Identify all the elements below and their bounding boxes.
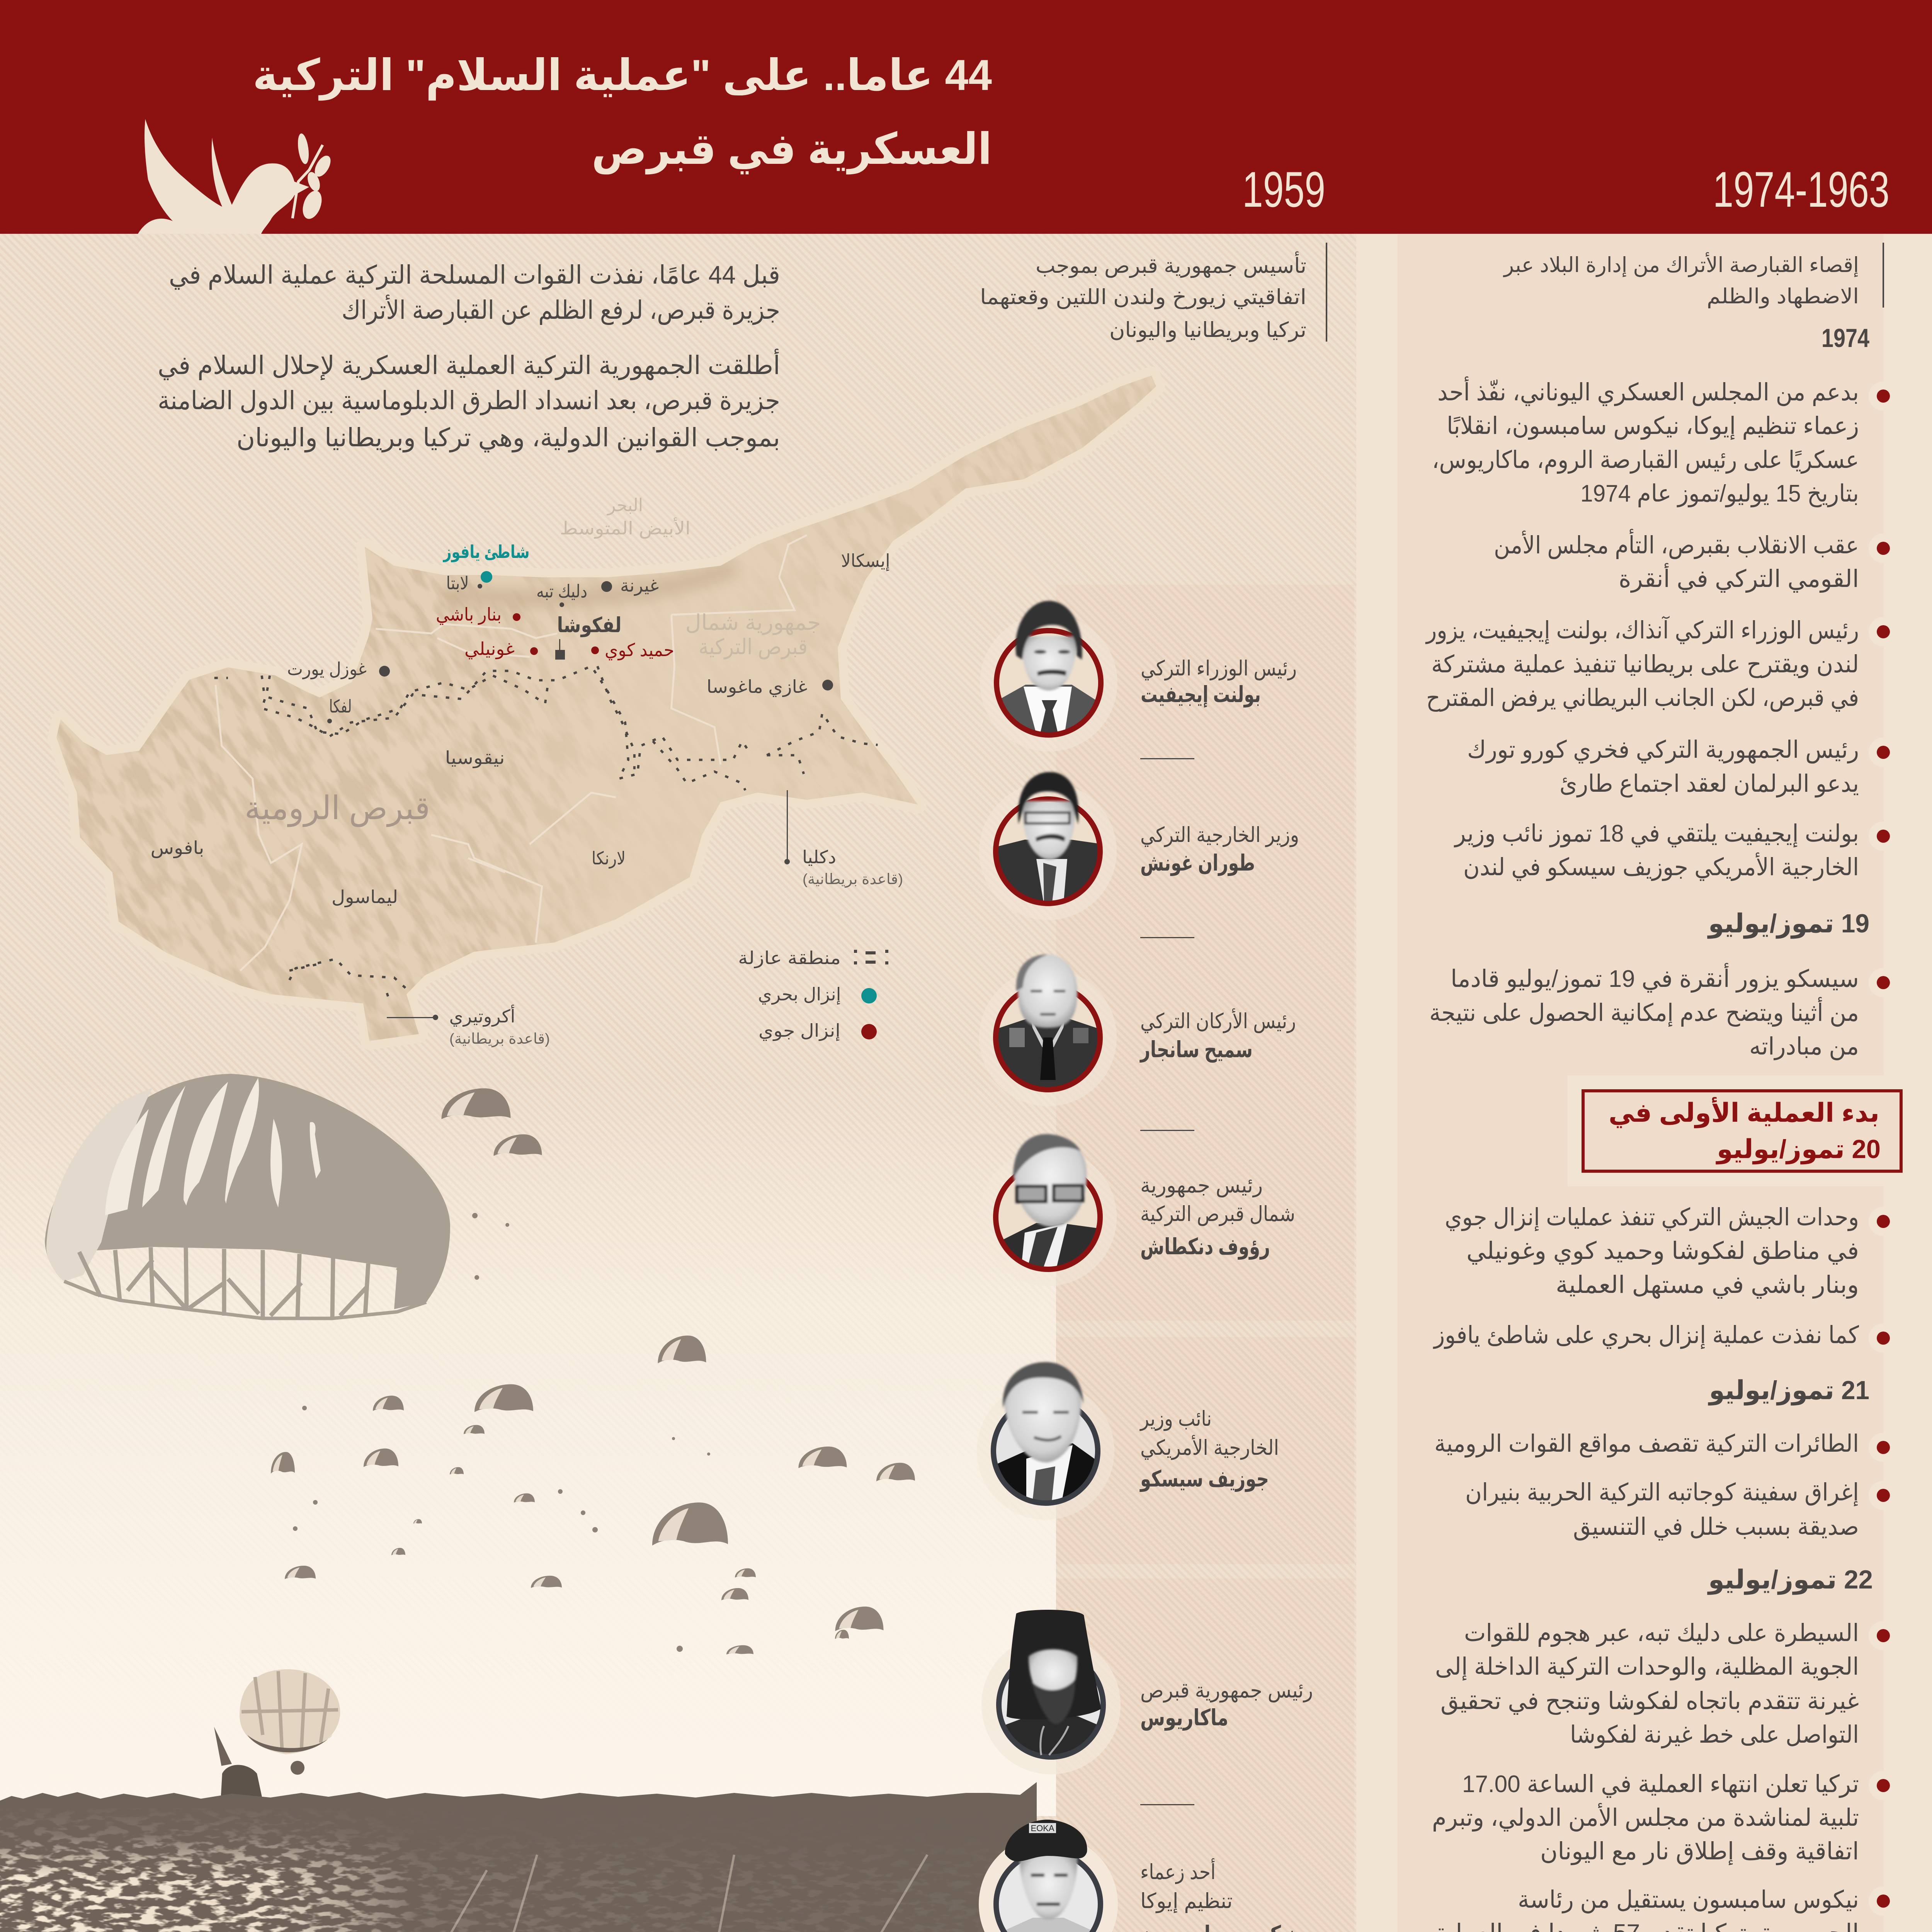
city markers: غيرنة — [620, 575, 659, 596]
1959 event text: اتفاقيتي زيورخ ولندن اللتين وقعتهما — [980, 286, 1306, 309]
caption: Ecevit: رئيس الوزراء التركي — [1141, 657, 1297, 680]
near parachute and soldier — [214, 1669, 340, 1808]
event text: Sisco in Ankara: من أثينا ويتضح عدم إمكانية الحصول على نتيجة — [1429, 997, 1859, 1027]
event text: airborne landings: في مناطق لفكوشا وحميد كوي وغونيلي — [1466, 1238, 1859, 1265]
caption: Denktas: رئيس جمهورية — [1140, 1174, 1263, 1197]
caption: Sampson — [1140, 1858, 1295, 1932]
city markers: إيسكالا — [841, 551, 890, 571]
event text: Dilekkaya: السيطرة على دليك تبه، عبر هجوم للقوات — [1464, 1620, 1859, 1647]
city markers: لارنكا — [592, 848, 626, 869]
distant parachutes — [271, 1088, 915, 1655]
city markers: لابتا — [446, 573, 469, 593]
buffer zone dotted line — [214, 666, 878, 997]
caption: Gunes: طوران غونش — [1140, 850, 1255, 876]
city markers: بافوس — [151, 838, 204, 859]
intro text: أطلقت الجمهورية التركية العملية العسكرية لإحلال السلام في — [158, 349, 780, 380]
city markers: غازي ماغوسا — [706, 677, 808, 697]
ground — [0, 1782, 1037, 1932]
event text: airborne landings: وبنار باشي في مستهل العملية — [1556, 1272, 1859, 1299]
event text: coup: زعماء تنظيم إيوكا، نيكوس سامبسون، انقلابًا — [1447, 413, 1859, 440]
intro text: جزيرة قبرص، لرفع الظلم عن القبارصة الأتراك — [342, 294, 780, 325]
caption: Denktas: شمال قبرص التركية — [1140, 1202, 1295, 1226]
event text: Sisco in Ankara — [1429, 963, 1859, 1060]
city markers — [151, 551, 890, 908]
caption: Sampson: تنظيم إيوكا — [1140, 1889, 1233, 1913]
caption: Sampson: أحد زعماء — [1140, 1858, 1216, 1884]
sea label: الأبيض المتوسط — [560, 517, 690, 539]
Yavuz beach marker: شاطئ يافوز — [443, 542, 529, 562]
1959 event text — [980, 243, 1327, 342]
event text: Dilekkaya — [1435, 1620, 1859, 1748]
caption: Sisco: الخارجية الأمريكي — [1140, 1435, 1279, 1460]
city markers: لفكا — [329, 696, 352, 716]
right column: operation events — [1432, 1204, 1873, 1932]
heading: 19 July: 19 تموز/يوليو — [1707, 909, 1869, 939]
callout: first operation: 20 تموز/يوليو — [1716, 1134, 1881, 1165]
airborne landing markers: بنار باشي — [436, 604, 502, 625]
Akrotiri base callout: (قاعدة بريطانية) — [449, 1031, 550, 1048]
heading: 21 July: 21 تموز/يوليو — [1708, 1376, 1869, 1406]
map legend: إنزال بحري — [758, 984, 841, 1005]
region labels: قبرص التركية — [699, 634, 808, 660]
heading: 1974: 1974 — [1821, 323, 1869, 353]
event text: Kocatepe: إغراق سفينة كوجاتبه التركية الحربية بنيران — [1465, 1479, 1859, 1507]
airborne landing markers: حميد كوي — [605, 640, 674, 661]
right column: timeline bullets — [1869, 381, 1898, 1932]
event text: naval landing: كما نفذت عملية إنزال بحري على شاطئ يافوز — [1433, 1322, 1859, 1349]
intro text: جزيرة قبرص، بعد انسداد الطرق الدبلوماسية بين الدول الضامنة — [158, 386, 780, 416]
event text: ceasefire — [1432, 1771, 1859, 1866]
sea label — [560, 495, 690, 539]
event text: security council — [1494, 529, 1859, 593]
event text: Dilekkaya: التواصل على خط غيرنة لفكوشا — [1570, 1721, 1859, 1748]
airborne landing markers — [436, 604, 674, 661]
caption: Gunes: وزير الخارجية التركي — [1140, 823, 1299, 847]
city markers: غوزل يورت — [287, 659, 367, 680]
event text: parliament: يدعو البرلمان لعقد اجتماع طارئ — [1560, 770, 1859, 798]
title: العسكرية في قبرص — [592, 125, 992, 175]
event text: coup: بدعم من المجلس العسكري اليوناني، نفّذ أحد — [1437, 376, 1859, 406]
city markers: دليك تبه — [536, 581, 587, 601]
event text: Sampson resigns — [1435, 1886, 1859, 1932]
event text: ceasefire: تركيا تعلن انتهاء العملية في الساعة 17.00 — [1462, 1771, 1859, 1798]
island land mass — [56, 376, 1156, 1041]
caption: Makarios: رئيس جمهورية قبرص — [1140, 1679, 1313, 1702]
event text: Ecevit in London — [1425, 616, 1859, 712]
event text: parliament: رئيس الجمهورية التركي فخري كورو تورك — [1467, 736, 1859, 764]
event text: security council: القومي التركي في أنقرة — [1619, 563, 1859, 593]
caption: Ecevit: بولنت إيجيفيت — [1141, 682, 1261, 708]
1959 event text: تركيا وبريطانيا واليونان — [1109, 318, 1306, 342]
region labels: جمهورية شمال — [685, 610, 821, 635]
event text: Sisco in Ankara: من مبادراته — [1749, 1033, 1859, 1060]
city markers: ليماسول — [332, 887, 398, 908]
event text: coup: عسكريًا على رئيس القبارصة الروم، ماكاريوس، — [1432, 447, 1859, 474]
district borders — [216, 535, 807, 971]
event text: coup: بتاريخ 15 يوليو/تموز عام 1974 — [1580, 480, 1859, 507]
map of Cyprus — [48, 367, 1165, 1049]
heading: 1959: 1959 — [1242, 161, 1325, 218]
right column: 1974 events — [1425, 323, 1869, 1060]
map legend — [738, 948, 888, 1041]
callout: first operation: بدء العملية الأولى في — [1609, 1097, 1879, 1128]
caption: Denktas: رؤوف دنكطاش — [1140, 1234, 1270, 1260]
person: Turan Gunes — [979, 772, 1117, 920]
sea label: البحر — [607, 495, 643, 516]
event text: Sisco in Ankara: سيسكو يزور أنقرة في 19 تموز/يوليو قادما — [1451, 963, 1859, 993]
event text: Sampson resigns: نيكوس سامبسون يستقيل من رئاسة — [1518, 1886, 1859, 1913]
event text: parliament — [1467, 736, 1859, 798]
region labels — [245, 610, 821, 827]
person: Bulent Ecevit — [980, 601, 1117, 752]
intro text: قبل 44 عامًا، نفذت القوات المسلحة التركية عملية السلام في — [169, 260, 780, 290]
Yavuz beach marker — [443, 542, 529, 583]
caption: Makarios — [1140, 1679, 1313, 1805]
event text: Kocatepe — [1465, 1479, 1859, 1541]
person: Rauf Denktas — [979, 1134, 1117, 1286]
1963-1974 event text — [1503, 243, 1884, 308]
title — [253, 51, 992, 175]
event text: Dilekkaya: الجوية المظلية، والوحدات التركية الداخلة إلى — [1435, 1653, 1859, 1681]
caption: Sisco: جوزيف سيسكو — [1139, 1466, 1269, 1492]
caption: Gunes — [1140, 823, 1299, 938]
intro text: بموجب القوانين الدولية، وهي تركيا وبريطانيا واليونان — [236, 423, 780, 452]
Dhekelia base callout — [784, 790, 903, 888]
map legend: منطقة عازلة — [738, 948, 841, 968]
callout: first operation — [1568, 1075, 1932, 1186]
capital Lefkosa: لفكوشا — [557, 614, 621, 637]
map legend: إنزال جوي — [759, 1020, 840, 1041]
panel: header band — [0, 0, 1932, 234]
event text: 18 July: الخارجية الأمريكي جوزيف سيسكو في لندن — [1463, 852, 1859, 881]
event text: 18 July: بولنت إيجيفيت يلتقي في 18 تموز نائب وزير — [1454, 820, 1859, 848]
caption: Sisco: نائب وزير — [1139, 1407, 1212, 1431]
region labels: قبرص الرومية — [245, 790, 430, 827]
sky fade — [0, 1082, 1056, 1816]
event text: ceasefire: اتفاقية وقف إطلاق نار مع اليونان — [1540, 1838, 1859, 1866]
Dhekelia base callout: (قاعدة بريطانية) — [803, 871, 903, 888]
caption: Sancar: سميح سانجار — [1139, 1037, 1253, 1063]
caption: Sancar — [1139, 1008, 1296, 1131]
event text: airborne landings: وحدات الجيش التركي تنفذ عمليات إنزال جوي — [1445, 1204, 1859, 1231]
event text: 18 July — [1454, 820, 1859, 881]
large parachute — [45, 1074, 450, 1318]
caption: Sisco — [1139, 1407, 1279, 1492]
event text: security council: عقب الانقلاب بقبرص، التأم مجلس الأمن — [1494, 529, 1859, 559]
caption: Denktas — [1140, 1174, 1295, 1260]
person: Makarios — [981, 1610, 1121, 1774]
event text: Ecevit in London: في قبرص، لكن الجانب البريطاني يرفض المقترح — [1426, 685, 1859, 712]
1963-1974 event text: الاضطهاد والظلم — [1707, 285, 1859, 308]
1959 event text: تأسيس جمهورية قبرص بموجب — [1036, 251, 1306, 278]
capital Lefkosa — [555, 614, 621, 660]
1963-1974 event text: إقصاء القبارصة الأتراك من إدارة البلاد عبر — [1503, 252, 1859, 277]
panel: key figures background — [1056, 585, 1354, 1932]
intro text — [158, 260, 780, 452]
caption: Makarios: ماكاريوس — [1140, 1705, 1228, 1731]
Akrotiri base callout: أكروتيري — [449, 1005, 515, 1027]
event text: coup — [1432, 376, 1859, 507]
person: Nikos Sampson — [979, 1820, 1118, 1932]
person: Semih Sancar — [979, 954, 1117, 1106]
heading: 22 July: 22 تموز/يوليو — [1707, 1565, 1873, 1595]
caption: Sancar: رئيس الأركان التركي — [1140, 1008, 1296, 1033]
terrain relief — [57, 383, 1152, 1039]
title: 44 عاما.. على "عملية السلام" التركية — [253, 51, 992, 101]
person: Nikos Sampson: ΕΟΚΑ — [1031, 1823, 1054, 1833]
event text: Ecevit in London: لندن ويقترح على بريطانيا تنفيذ عملية مشتركة — [1431, 651, 1859, 678]
event text: Ecevit in London: رئيس الوزراء التركي آنذاك، بولنت إيجيفيت، يزور — [1425, 616, 1859, 645]
event text: Dilekkaya: غيرنة تتقدم باتجاه لفكوشا وتنجح في تحقيق — [1440, 1688, 1859, 1715]
Dhekelia base callout: دكليا — [802, 847, 836, 867]
caption: Ecevit — [1140, 657, 1297, 759]
photo: paratroopers landing — [0, 1074, 1056, 1932]
event text: ceasefire: تلبية لمناشدة من مجلس الأمن الدولي، وتبرم — [1432, 1803, 1859, 1832]
city markers: نيقوسيا — [445, 748, 505, 769]
airborne landing markers: غونيلي — [464, 639, 515, 660]
event text: Kocatepe: صديقة بسبب خلل في التنسيق — [1573, 1514, 1859, 1541]
Akrotiri base callout — [387, 1005, 550, 1048]
icon: peace dove with olive branch — [138, 119, 334, 234]
event text: air strikes: الطائرات التركية تقصف مواقع القوات الرومية — [1434, 1430, 1859, 1458]
event text: airborne landings — [1445, 1204, 1859, 1299]
person: Joseph Sisco — [977, 1362, 1114, 1520]
